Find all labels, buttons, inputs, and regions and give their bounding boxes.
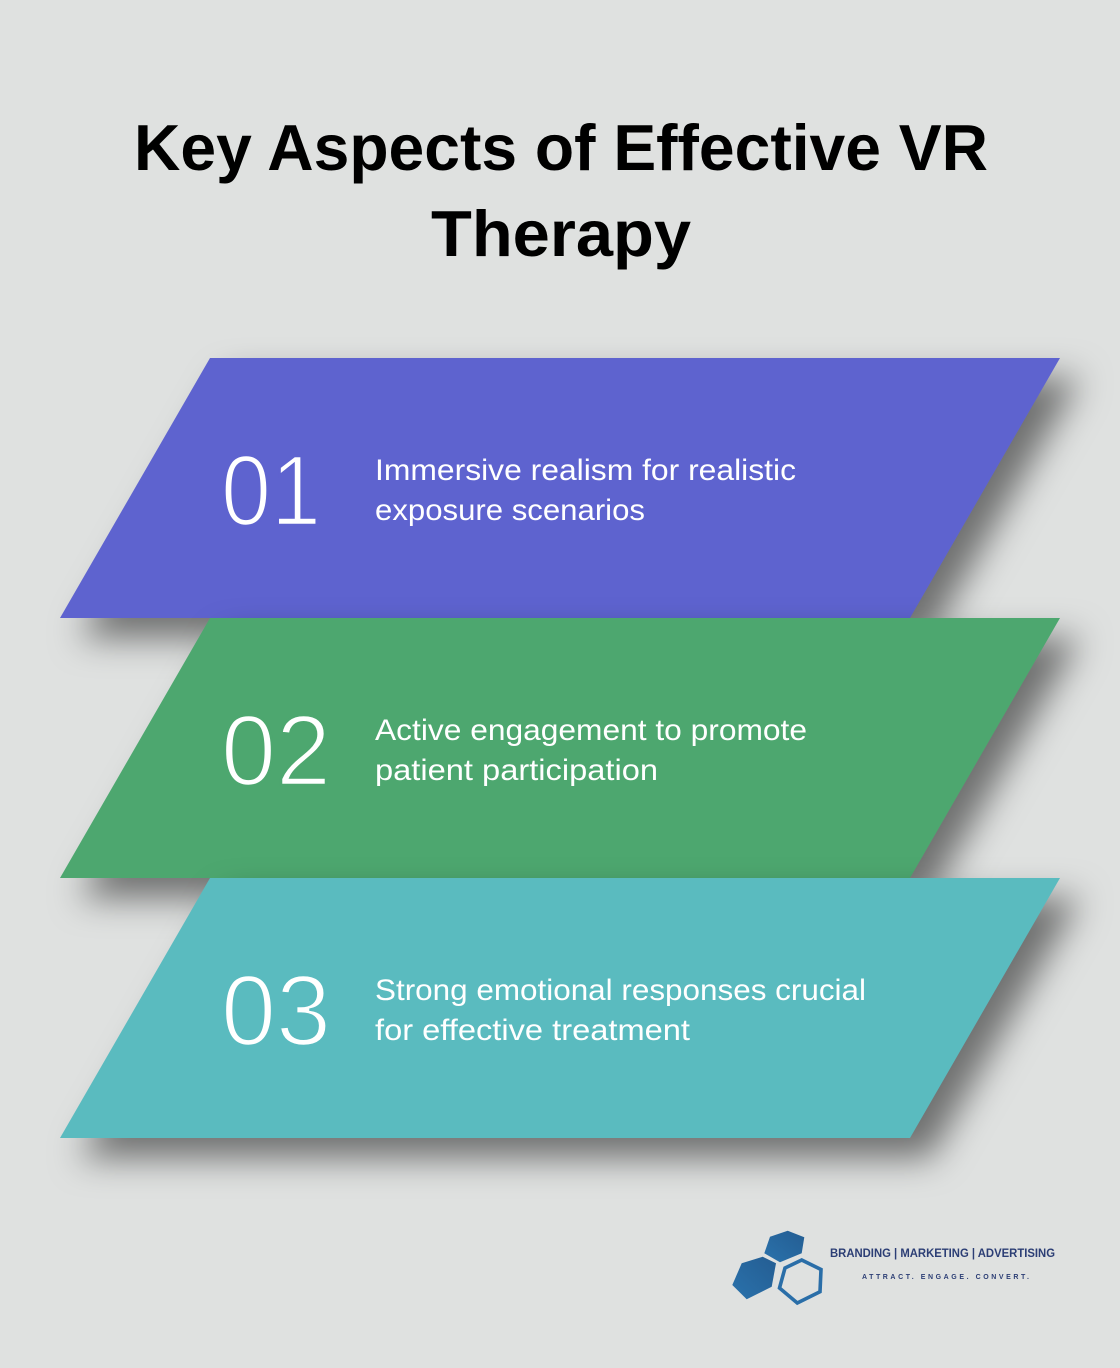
logo [732,1231,1055,1303]
panel: step 02 [60,618,1060,878]
title: Key Aspects of Effective VR [134,111,988,184]
text: step 03: for effective treatment [375,1014,691,1047]
logo text: BRANDING | MARKETING | ADVERTISING [830,1248,1055,1260]
purple parallelogram [60,358,1060,618]
title [134,111,988,270]
text: step 01: exposure scenarios [375,494,645,527]
teal parallelogram [60,878,1060,1138]
number 01: 01 [221,435,321,547]
title: Therapy [431,197,691,270]
number 03: 03 [221,955,331,1067]
text: step 03: Strong emotional responses crucial [375,974,866,1007]
green parallelogram [60,618,1060,878]
number 02: 02 [221,695,331,807]
text: step 02 [375,714,807,787]
text: step 02: patient participation [375,754,658,787]
text: step 01 [375,454,796,527]
text: step 03 [375,974,866,1047]
text: step 01: Immersive realism for realistic [375,454,796,487]
panel: step 03 [60,878,1060,1138]
logo text: ATTRACT. ENGAGE. CONVERT. [862,1274,1029,1281]
panel: step 01 [60,358,1060,618]
text: step 02: Active engagement to promote [375,714,807,747]
icon: hexagons [732,1231,821,1303]
logo text [830,1248,1055,1281]
